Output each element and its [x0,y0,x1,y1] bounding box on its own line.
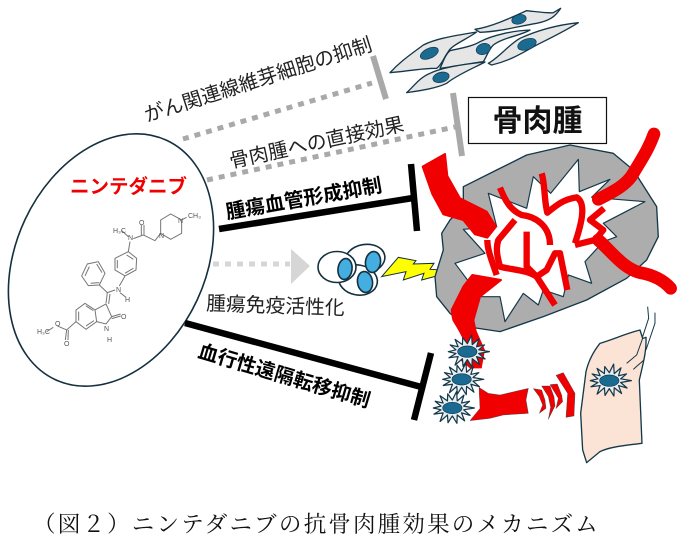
inhibition path: direct effect on osteosarcoma [207,93,462,180]
lung [581,330,646,463]
tumor cell cluster [433,335,489,423]
drug name: ニンテダニブ [70,175,188,198]
structure atom labels: H [107,337,112,344]
label box: osteosarcoma [468,98,606,144]
structure atom labels: CH₃ [188,213,201,220]
icon: immune cells [318,241,387,298]
structure atom labels: N [159,233,164,240]
tumor mass [435,145,658,332]
label box: osteosarcoma: 骨肉腫 [492,105,582,138]
arrow: immune activation [213,249,310,284]
structure atom labels: H [125,297,130,304]
inhibition arrow: angiogenesis [219,164,417,231]
structure atom labels: N [116,287,121,294]
structure atom labels: N [128,235,133,242]
structure atom labels: O [55,321,61,328]
circulating vessel [470,373,575,421]
structure atom labels: H₃C [113,228,126,235]
structure atom labels: O [121,314,127,321]
structure atom labels: N [178,218,183,225]
panel: nintedanib ellipse [0,100,253,420]
label: direct effect on osteosarcoma: 骨肉腫への直接効果 [227,114,406,173]
label: cancer-associated fibroblast inhibition: がん関連線維芽細胞の抑制 [142,34,375,127]
caption: （図２）ニンテダニブの抗骨肉腫効果のメカニズム [33,512,600,537]
icon: metastasis and lung [433,300,655,463]
nintedanib chemical structure [47,214,187,340]
structure atom labels: H₃C [37,329,50,336]
inhibition path: cancer-associated fibroblasts [183,56,386,139]
icon: lightning bolt [382,257,457,280]
inhibition arrow: hematogenous metastasis [185,323,431,420]
lung metastasis cell [590,364,631,396]
label: tumor immune activation: 腫瘍免疫活性化 [206,293,345,320]
icon: fibroblast cells [390,8,578,93]
label: hematogenous metastasis inhibition: 血行性遠隔転移抑制 [196,341,373,412]
structure atom labels: O [64,341,70,348]
vessels [487,173,604,305]
central necrosis burst [455,159,645,322]
intravasation vessel [452,300,485,368]
structure atom labels: O [139,220,145,227]
icon: osteosarcoma tumor with vessels [423,134,671,339]
label: tumor angiogenesis inhibition: 腫瘍血管形成抑制 [224,174,384,224]
structure atom labels: N [104,326,109,333]
structure atom labels [37,213,201,348]
